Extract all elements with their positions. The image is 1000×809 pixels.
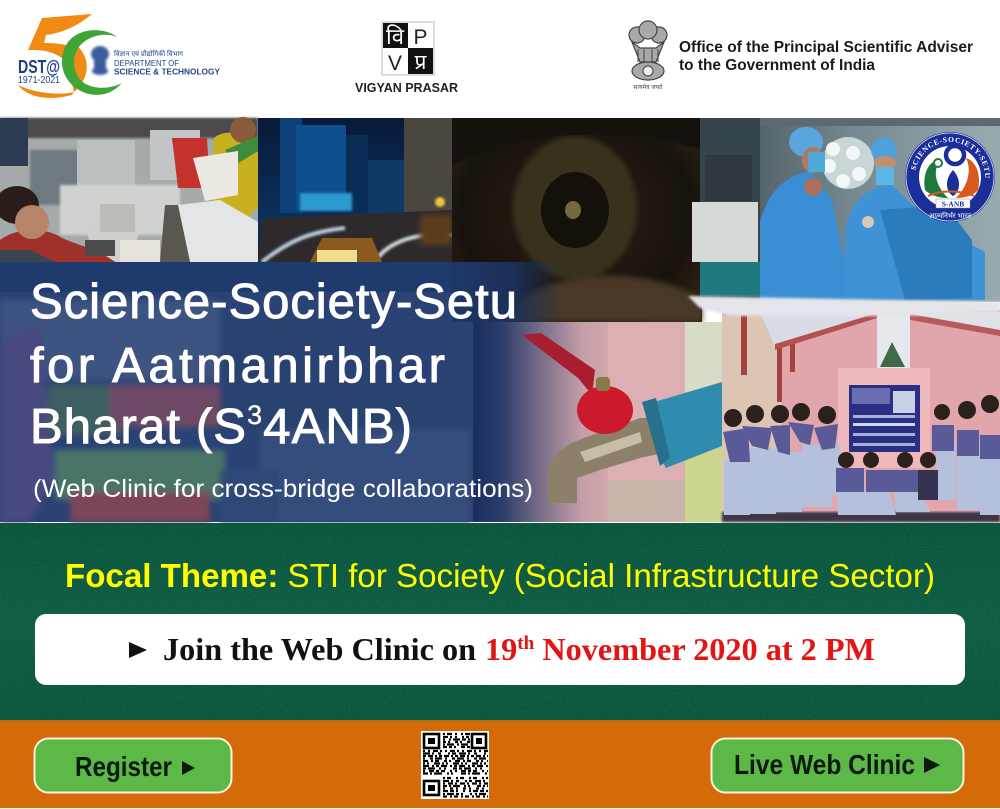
icon: national emblem small [91, 46, 109, 75]
logo: S-ANB seal: S-ANB [942, 200, 964, 208]
logo: state emblem [629, 21, 667, 91]
logo: DST 50 years: विज्ञान एवं प्रौद्योगिकी विभाग [114, 49, 184, 58]
logo: state emblem: सत्यमेव जयते [633, 83, 663, 91]
subtitle: (Web Clinic for cross-bridge collaborations) [33, 475, 533, 503]
photo: water tap [475, 322, 723, 522]
photo: tunnel [452, 118, 702, 322]
logo: Vigyan Prasar: VIGYAN PRASAR [355, 81, 458, 95]
logo: S-ANB seal: SCIENCE-SOCIETY-SETU [911, 137, 990, 178]
photo: school girls [688, 296, 1000, 522]
text: office of the PSA [679, 39, 973, 74]
title: 3 [247, 400, 262, 430]
footer strip [0, 808, 1000, 809]
button: register [34, 738, 232, 792]
title [30, 275, 517, 454]
header band [0, 0, 1000, 118]
button: register: Register [75, 751, 172, 782]
panel: focal theme [0, 523, 1000, 721]
logo: S-ANB seal: आत्मनिर्भर भारत [929, 211, 972, 220]
logo: DST 50 years [18, 14, 220, 98]
logo: Vigyan Prasar: P [413, 26, 428, 49]
photo: bank counter [0, 117, 260, 264]
callout: web clinic date: th [517, 633, 535, 654]
logo: DST 50 years: DST@ [18, 57, 60, 77]
title: Science-Society-Setu [30, 275, 517, 329]
heading: focal theme: Focal Theme: STI for Society (Social Infrastructure Sector) [65, 557, 935, 594]
logo: DST 50 years: DEPARTMENT OF [114, 58, 179, 68]
photo: surgeons [692, 118, 1000, 302]
title: Bharat (S [30, 400, 246, 454]
logo: DST 50 years: 1971-2021 [18, 74, 60, 86]
logo: Vigyan Prasar: V [388, 52, 402, 75]
logo: Vigyan Prasar: प्र [415, 51, 428, 74]
photo: city at night [258, 118, 454, 264]
text: office of the PSA: to the Government of India [679, 57, 875, 74]
logo: Vigyan Prasar: वि [386, 24, 405, 49]
photo: market with navy overlay [0, 262, 562, 522]
text: office of the PSA: Office of the Principal Scientific Adviser [679, 39, 973, 56]
title: 4ANB) [263, 400, 412, 454]
callout: web clinic date [35, 614, 965, 685]
photo collage [0, 116, 1000, 523]
title: for Aatmanirbhar [30, 339, 445, 393]
panel: action bar [0, 720, 1000, 808]
logo: DST 50 years: SCIENCE & TECHNOLOGY [114, 66, 220, 76]
button: live web clinic: Live Web Clinic [734, 749, 915, 780]
callout: web clinic date: 19 [485, 631, 517, 667]
logo: Vigyan Prasar [355, 22, 458, 95]
button: live web clinic [712, 738, 964, 792]
logo: S-ANB seal [905, 132, 995, 222]
QR code [421, 731, 489, 799]
callout: web clinic date: November 2020 at 2 PM [534, 631, 875, 667]
callout: web clinic date: Join the Web Clinic on [163, 631, 476, 667]
